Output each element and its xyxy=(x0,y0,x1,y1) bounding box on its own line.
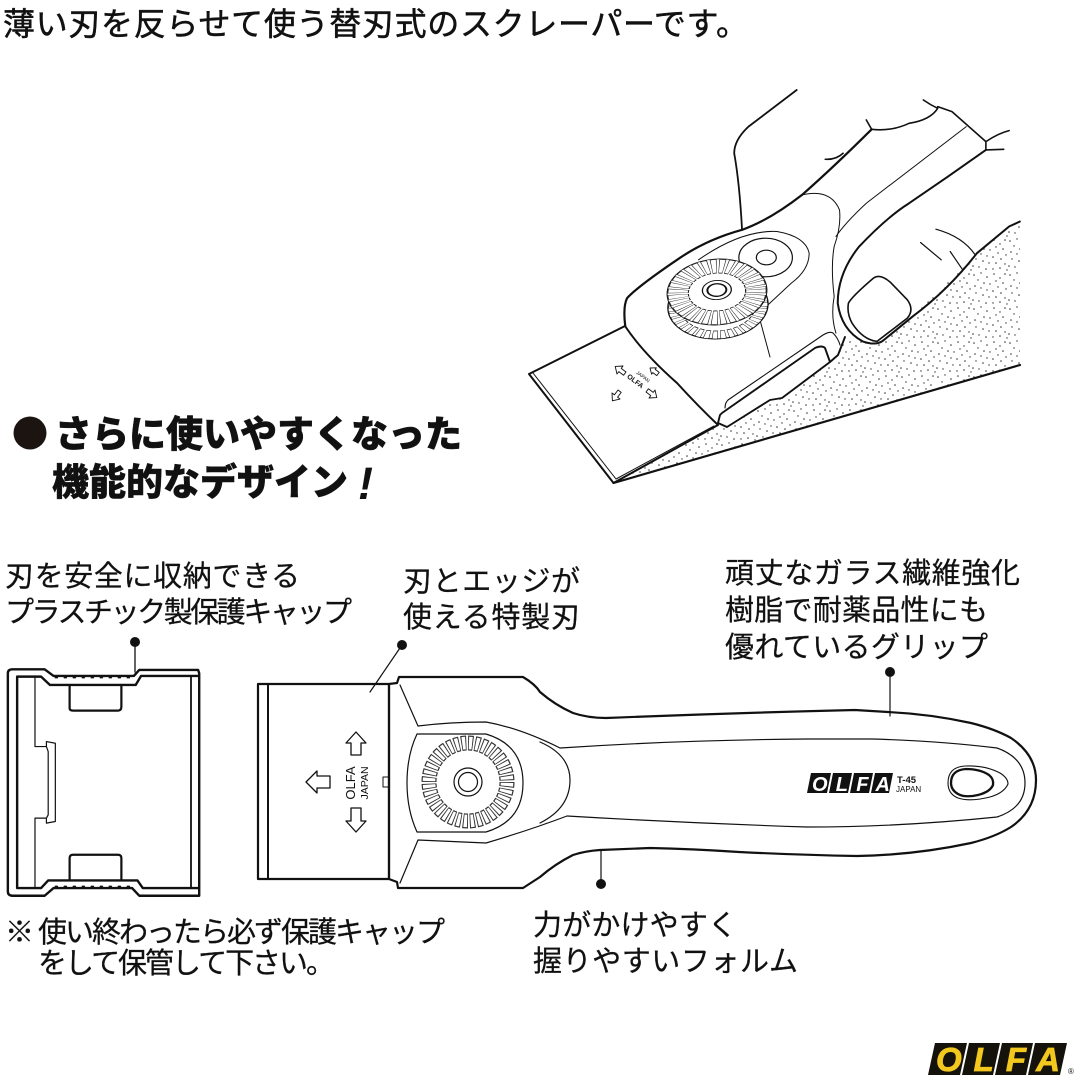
callout: grip: 頑丈なガラス繊維強化 xyxy=(725,557,1020,590)
callout: form: 握りやすいフォルム xyxy=(533,945,798,978)
callout: protective cap: 刃を安全に収納できる xyxy=(5,560,300,593)
callout: protective cap xyxy=(5,560,352,672)
headline line 2: 機能的なデザイン xyxy=(52,461,348,503)
grip panel xyxy=(400,685,1025,883)
dial of scraper in use xyxy=(665,256,770,342)
OLFA logo: OLFA xyxy=(936,1041,1060,1078)
exclamation mark: ! xyxy=(358,458,373,509)
handle outline xyxy=(389,677,1036,888)
callout: form xyxy=(533,850,798,978)
blade markings: JAPAN xyxy=(635,370,651,385)
handle logo xyxy=(807,773,921,796)
note: storage xyxy=(5,916,445,980)
illustration: scraper held by a hand xyxy=(529,90,1020,483)
blade: JAPAN xyxy=(359,766,371,800)
headline line 1: さらに使いやすくなった xyxy=(55,414,462,455)
callout: protective cap: プラスチック製保護キャップ xyxy=(5,596,352,629)
callout: grip: 樹脂で耐薬品性にも xyxy=(725,594,988,627)
handle logo: OLFA xyxy=(812,774,890,796)
callout: grip xyxy=(725,557,1020,716)
stippled surface xyxy=(614,222,1020,483)
scraper top view xyxy=(258,677,1036,888)
callout: special blade: 使える特製刃 xyxy=(403,601,580,634)
dial xyxy=(429,743,507,821)
surface edge line xyxy=(614,365,1020,483)
blade: OLFA xyxy=(343,766,358,800)
note: storage: ※ 使い終わったら必ず保護キャップ xyxy=(5,916,445,949)
note: storage: をして保管して下さい。 xyxy=(38,947,335,980)
headline xyxy=(14,414,462,503)
bullet xyxy=(14,416,46,450)
callout: grip: 優れているグリップ xyxy=(725,631,988,664)
protective cap drawing xyxy=(8,669,199,896)
blade markings: OLFA xyxy=(625,373,644,390)
blade xyxy=(529,326,718,483)
title: 薄い刃を反らせて使う替刃式のスクレーパーです。 xyxy=(3,6,748,42)
blade markings xyxy=(608,362,660,404)
handle logo: JAPAN xyxy=(896,785,921,794)
blade side slot xyxy=(718,346,830,427)
callout: form: 力がかけやすく xyxy=(533,909,737,942)
callout: special blade: 刃とエッジが xyxy=(403,565,580,598)
OLFA logo: ® xyxy=(1068,1067,1074,1076)
callout: special blade xyxy=(370,565,580,692)
handle logo: T-45 xyxy=(897,775,917,786)
blade xyxy=(258,684,389,879)
hanging hole xyxy=(948,766,1008,800)
